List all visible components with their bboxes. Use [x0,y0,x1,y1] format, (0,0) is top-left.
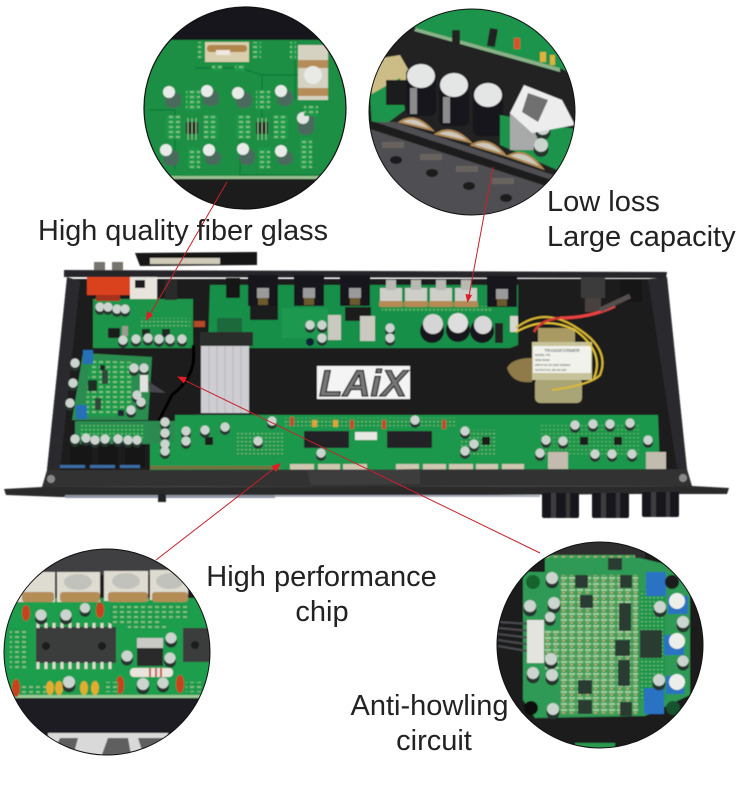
rear XLR jacks [226,275,517,307]
wires [498,622,533,652]
outline: chip circle [4,549,210,755]
label: low loss large capacity: Low loss [547,186,660,218]
red connector [194,321,205,327]
arrow: high performance chip [156,463,281,560]
board: front main pcb [60,415,666,470]
logo sticker fragment [48,733,168,758]
red film capacitors [12,602,184,697]
arrow: anti-howling circuit [177,376,540,553]
label: high quality fiber glass: High quality fiber glass [38,215,328,247]
board: anti-howling pcb [65,350,166,420]
outline: fiber glass circle [144,7,346,209]
rear connectors and antenna [94,252,257,272]
transformer label: OUTPUT:AC 18V-0V-18V [535,368,567,372]
white connector [527,620,544,663]
front row jacks [290,452,666,470]
panel pots [0,570,188,602]
callout circle: chip closeup [0,545,215,760]
callout circle: fiber glass closeup [144,8,346,208]
rear pots [379,280,478,307]
chassis right wall [648,277,687,470]
black front jacks [60,433,145,468]
chassis floor [47,279,687,470]
capacitors [524,572,690,719]
label: high performance chip: High performance [206,561,437,593]
logo sticker fragment [510,85,575,133]
transformer label: TRANSFORMER [544,348,580,353]
screws [524,575,680,715]
solder pads [166,42,318,168]
label: anti-howling circuit: Anti-howling [351,690,508,722]
panel markings [382,142,514,184]
label: low loss large capacity: Large capacity [547,221,736,253]
panel knobs [390,156,512,202]
op-amp ICs [205,431,622,448]
ribbon cable [195,332,253,423]
black signal cable [155,345,194,428]
label: high performance chip: chip [295,596,349,628]
capacitors [160,85,314,166]
blue trimmers [644,572,688,714]
power switch and red wires [560,278,642,318]
board [523,558,690,718]
yellow capacitors [46,681,99,695]
potentiometer top [205,42,328,100]
front panel edge [4,486,729,502]
LAiX logo sticker: LAiX [319,363,409,404]
board: top main pcb [208,275,518,348]
DIP chips [36,623,213,669]
large electrolytic capacitors [420,313,494,343]
label: anti-howling circuit: circuit [396,725,472,757]
chassis left wall [47,277,80,470]
arrow: fiber glass [146,182,227,321]
chips [575,558,662,716]
white trim pots [669,593,685,690]
outline: anti-howling circle [497,542,703,748]
large capacitors [406,64,503,136]
arrow: low loss capacitor [466,167,493,303]
green board and heat sink [499,112,574,170]
transformer label: MODEL:T01 [535,353,551,357]
outline: capacitor circle [369,9,575,215]
transformer label [533,346,591,373]
regulator [130,638,173,677]
red RCA jacks [87,277,177,301]
device: open chassis photo [4,252,729,518]
solder pads [10,604,204,694]
transformer label: INPUT:AC 0V-220V 50/60Hz [535,363,571,367]
chips [186,118,268,140]
chassis rear bar [64,270,667,278]
electrolytic capacitors [35,603,177,694]
transformer label: SIZE:41#32 [535,358,550,362]
callout circle: anti-howling closeup [498,542,702,748]
front panel [371,121,553,214]
panel pots [400,118,542,168]
front lip of chassis [42,469,692,487]
control knobs [542,492,679,518]
callout circle: capacitor closeup [370,10,574,214]
transformer [507,317,602,403]
board: small input pcb [93,299,193,348]
